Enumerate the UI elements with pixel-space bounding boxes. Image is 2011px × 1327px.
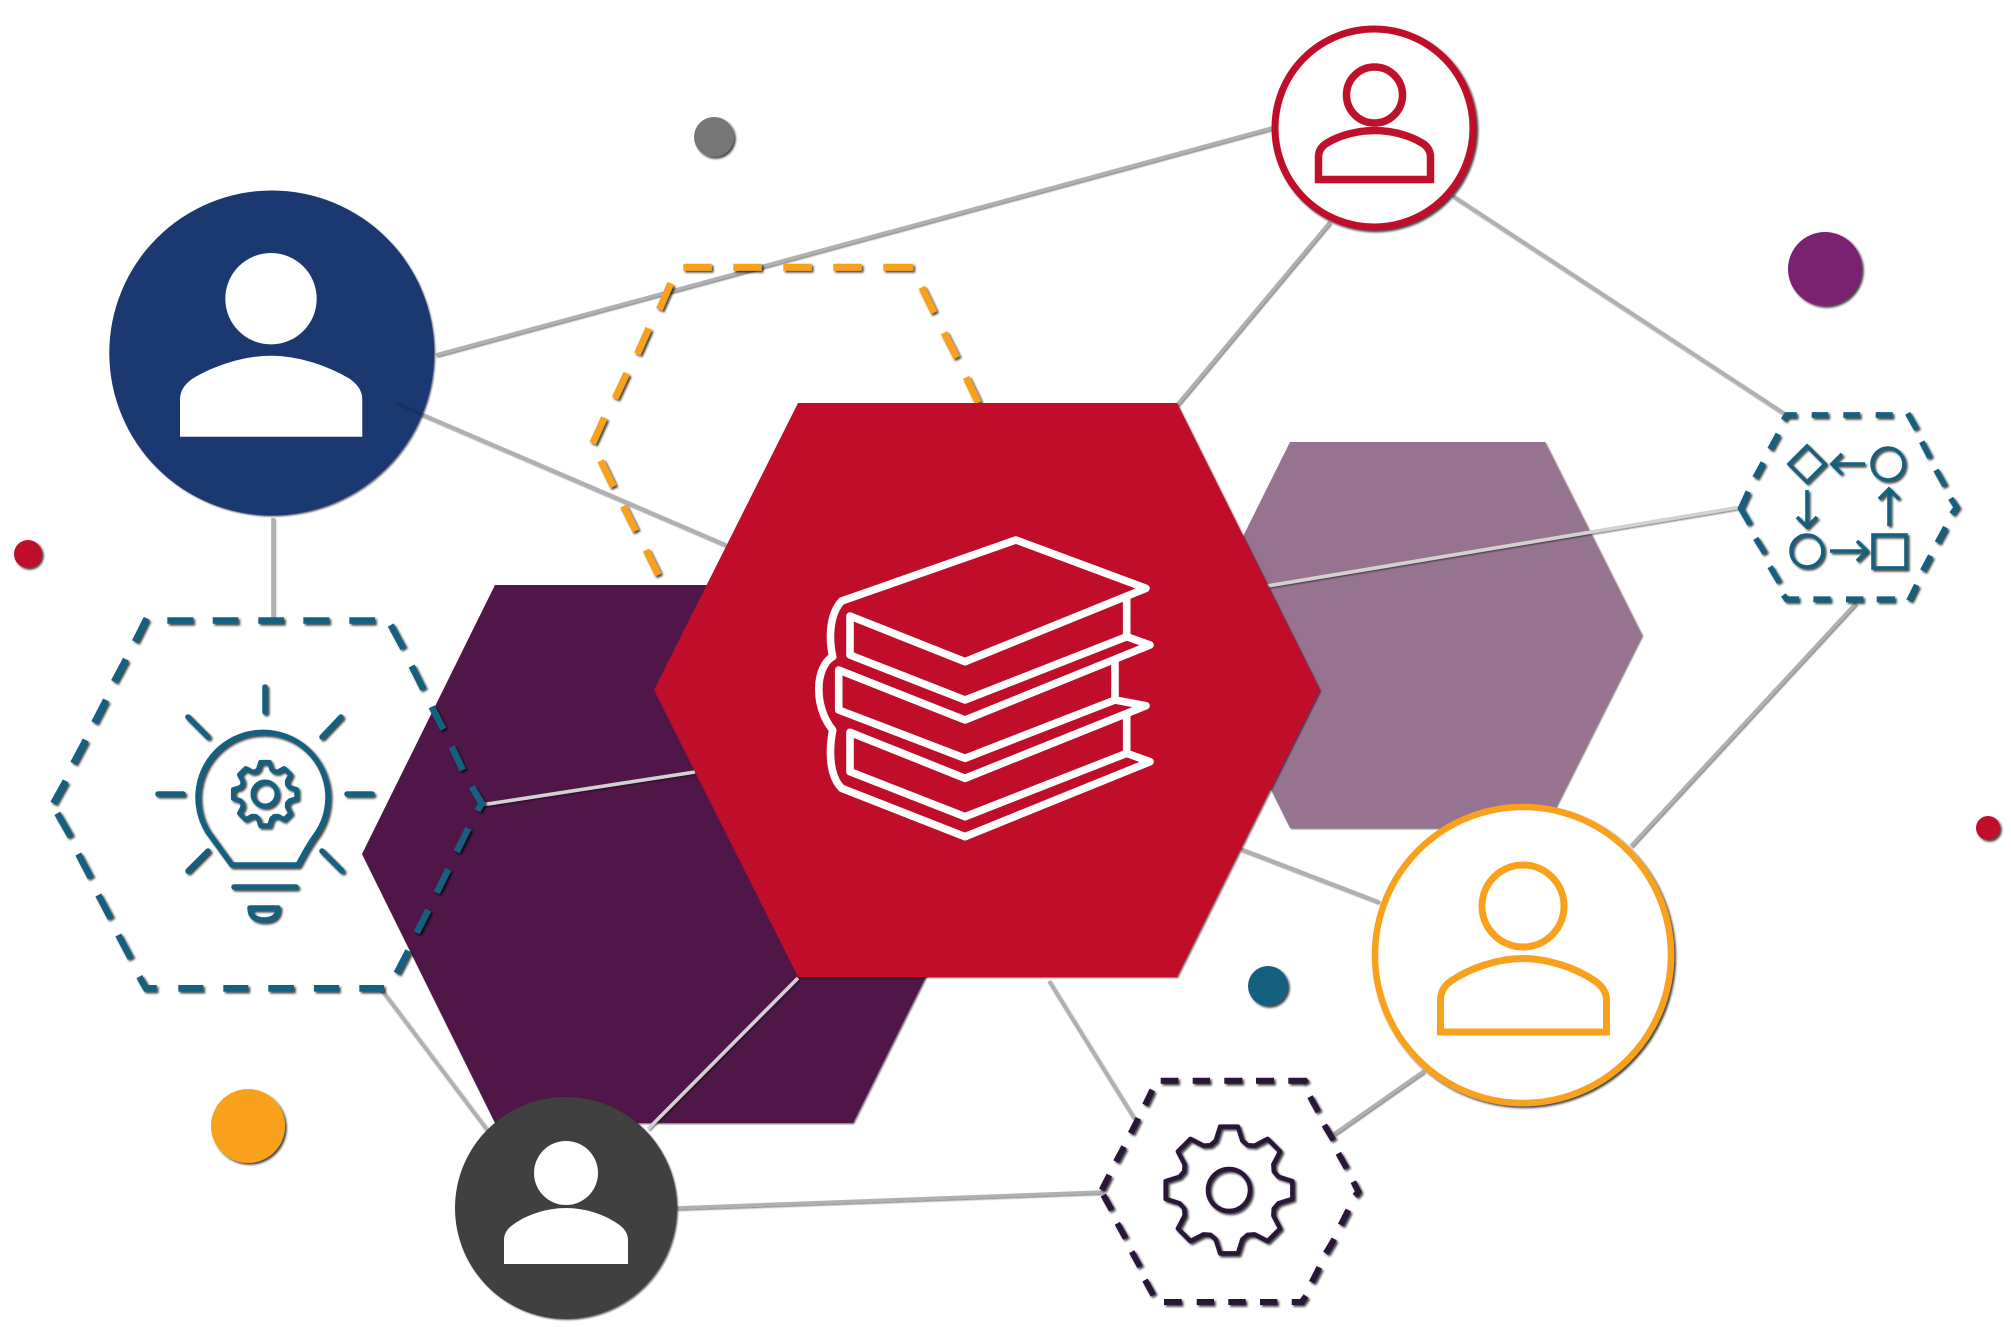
hexagon outline: teal dashed — [1741, 413, 1957, 601]
icon: stack of books — [819, 540, 1150, 837]
hexagon outline: dark purple dashed — [1102, 1081, 1358, 1302]
line: red person to flow hexagon — [1453, 196, 1785, 414]
line: flow hexagon across mauve hexagon — [1267, 507, 1741, 586]
icon: process flow — [1789, 446, 1906, 568]
icon: person — [180, 253, 362, 437]
dashed hexagon with process flow — [1741, 413, 1957, 601]
person circle: solid blue — [109, 190, 434, 516]
line: orange person to gear hexagon — [1334, 1071, 1424, 1134]
person circle: red outline — [1275, 29, 1473, 227]
circle — [1275, 29, 1473, 227]
dashed hexagon: orange — [593, 267, 978, 575]
dot: grey — [694, 117, 734, 157]
icon: lightbulb with gear — [158, 687, 372, 920]
line: grey person across purple hexagon — [648, 978, 798, 1129]
dashed hexagon with lightbulb — [53, 618, 482, 988]
icon: person — [504, 1141, 628, 1264]
line: red person to central hexagon — [1177, 222, 1330, 405]
icon: person — [1440, 865, 1606, 1032]
line: central hexagon to orange person — [1241, 849, 1379, 902]
line: lightbulb hexagon across purple hexagon — [481, 772, 695, 805]
circle — [455, 1097, 677, 1319]
dot: purple — [1788, 232, 1862, 306]
hexagon: mauve — [1194, 442, 1642, 828]
dot: teal — [1248, 966, 1288, 1006]
line: blue person to red person — [436, 128, 1272, 355]
line: blue person to central hexagon — [398, 404, 726, 545]
dot: small red right — [1976, 816, 2000, 840]
line: lightbulb hexagon to grey person — [381, 989, 488, 1131]
connector lines under the shapes — [273, 128, 1856, 1208]
line: central hexagon to gear hexagon — [1049, 981, 1134, 1118]
icon: gear — [1166, 1127, 1292, 1253]
icon: person — [1318, 67, 1430, 180]
hexagon: dark purple — [362, 585, 987, 1123]
circle — [109, 190, 434, 516]
dot: small red left — [14, 540, 42, 568]
hexagon outline: teal dashed — [53, 618, 482, 988]
person circle: solid grey — [455, 1097, 677, 1319]
dot: orange — [211, 1089, 285, 1163]
faint line end inside circle — [396, 403, 422, 414]
circle — [1375, 807, 1671, 1103]
person circle: orange outline — [1375, 807, 1671, 1103]
line: blue person to lightbulb hexagon — [271, 518, 275, 620]
line: grey person to gear hexagon — [676, 1192, 1103, 1208]
hexagon: central red — [654, 403, 1320, 977]
dashed hexagon with gear — [1102, 1081, 1358, 1302]
line: flow hexagon to orange person — [1631, 603, 1856, 846]
